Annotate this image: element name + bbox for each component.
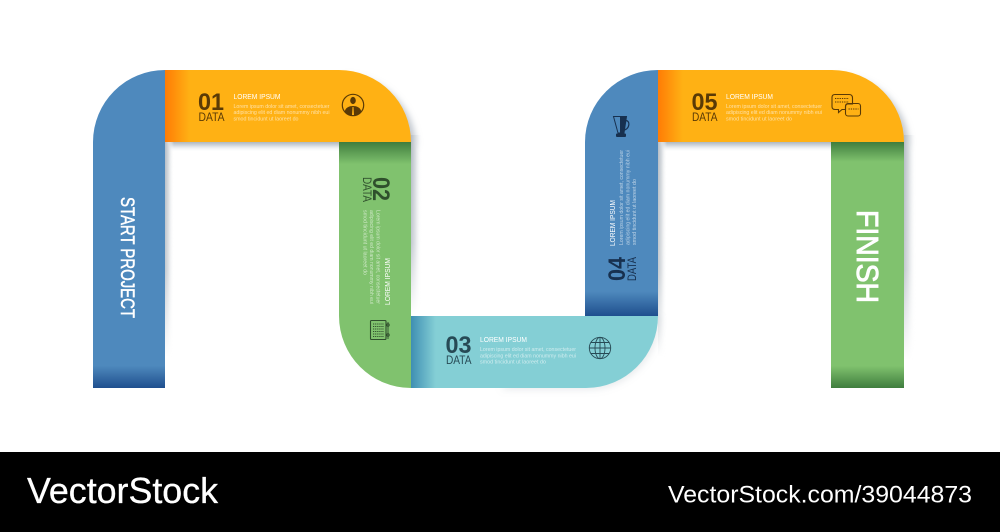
text block 05 (726, 94, 822, 122)
text block 03: LOREM IPSUM (480, 337, 527, 344)
number 03: 03 (446, 332, 472, 359)
text block 02: smod tincidunt ut laoreet do (362, 210, 368, 275)
panel: step 02 green (339, 142, 411, 388)
text block 02: adipiscing elit ed diam nonummy nibh eui (368, 210, 374, 304)
panel: step 01 orange (165, 70, 411, 142)
text block 05: adipiscing elit ed diam nonummy nibh eui (726, 110, 822, 116)
footer url: VectorStock.com/39044873 (668, 482, 972, 508)
text block 04: smod tincidunt ut laoreet do (632, 179, 638, 245)
text block 04: LOREM IPSUM (610, 200, 617, 246)
text block 02: Lorem ipsum dolor sit amet, consectetuer (374, 210, 380, 304)
footer logo: VectorStock (27, 470, 219, 511)
text block 04 (610, 150, 638, 246)
data label 04: DATA (625, 257, 639, 281)
label: finish: FINISH (850, 210, 885, 303)
panel: step 03 teal (411, 316, 658, 388)
text block 01: smod tincidunt ut laoreet do (234, 116, 299, 122)
text block 04: Lorem ipsum dolor sit amet, consectetuer (619, 150, 625, 245)
text block 02 (362, 210, 392, 305)
icon: businessman (342, 94, 364, 116)
text block 01: LOREM IPSUM (234, 94, 281, 101)
text block 03 (480, 337, 576, 366)
number 05: 05 (692, 89, 718, 116)
panel: step 04 blue (585, 70, 658, 316)
icon: cup (614, 116, 629, 137)
number 04: 04 (604, 256, 631, 281)
text block 01 (234, 94, 330, 122)
text block 01: Lorem ipsum dolor sit amet, consectetuer (234, 104, 330, 110)
text block 03: smod tincidunt ut laoreet do (480, 360, 546, 366)
data label 02: DATA (360, 177, 374, 202)
text block 05: LOREM IPSUM (726, 94, 773, 101)
panel: finish green column (831, 142, 904, 388)
icon: globe (589, 337, 611, 359)
text block 01: adipiscing elit ed diam nonummy nibh eui (234, 110, 330, 116)
text block 03: Lorem ipsum dolor sit amet, consectetuer (480, 347, 576, 353)
text block 02: LOREM IPSUM (385, 258, 392, 305)
icon: speech bubbles (832, 94, 860, 116)
data label 01: DATA (198, 110, 224, 124)
panel: step 05 orange (658, 70, 904, 142)
text block 05: smod tincidunt ut laoreet do (726, 116, 792, 122)
number 01: 01 (198, 89, 224, 116)
panel: start project blue column (93, 70, 165, 388)
text block 03: adipiscing elit ed diam nonummy nibh eui (480, 353, 576, 359)
data label 05: DATA (692, 110, 718, 124)
icon: notebook (370, 320, 389, 340)
soft drop shadows (165, 76, 916, 390)
text block 05: Lorem ipsum dolor sit amet, consectetuer (726, 104, 822, 110)
number 02: 02 (367, 177, 394, 201)
label: start project: START PROJECT (116, 197, 137, 318)
data label 03: DATA (446, 353, 472, 367)
text block 04: adipiscing elit ed diam nonummy nibh eui (626, 150, 632, 245)
footer bar (0, 452, 1000, 532)
